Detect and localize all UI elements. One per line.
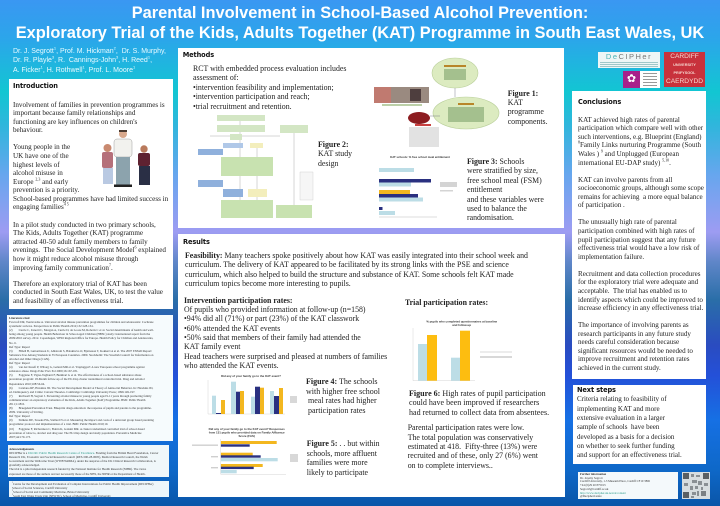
panel: further information: SegrottJ@Cardiff.ac.uk [580, 487, 608, 491]
heading: introduction: Introduction [13, 82, 58, 90]
heading: intervention participation rates: Intervention participation rates: [184, 296, 292, 304]
figure 5 caption: Figure 5: . . but within [307, 439, 380, 448]
authors: A. Ficker1, H. Rothwell1, Prof. L. Moore1 [13, 64, 135, 74]
figure 4 caption: Figure 4: The schools [306, 377, 377, 386]
panel: literature cited: (8) Bruegelen/Prevention Trust. Blueprint drugs education: the response of pupils and parents to the programme. [9, 406, 152, 410]
figure 5 caption: schools, more affluent [307, 449, 377, 458]
figure 2: study design flowchart [198, 115, 314, 218]
text: methods list: •intervention participation and reach; [193, 92, 310, 101]
text: conclusions body [578, 116, 704, 372]
panel: literature cited: No. 6. [9, 341, 17, 345]
text: young people: highest levels of [13, 161, 60, 169]
figure 5: affluence bar chart: Score (FAS) [239, 434, 255, 438]
panel: literature cited: communication: an exploratory evaluation of the Kids, Adults Together (KAT) Programme. BMC Public Health [9, 398, 145, 402]
authors: Dr. R. Playle3, R. Cannings-John3, H. Reed1, [13, 55, 152, 64]
authors: Dr. J. Segrott1, Prof. M. Hickman2, Dr. S. Murphy, [13, 45, 166, 54]
figure 6 caption: Figure 6: High rates of pupil participation [409, 389, 546, 398]
figure 2 caption: Figure 2: [318, 140, 349, 149]
text: conclusions body: socioeconomic groups, although some scope [578, 184, 704, 192]
text: pilot study: evenings. The Social Development Model6 explained [13, 245, 166, 254]
text: methods list [193, 64, 346, 111]
figure 6 caption: had returned to collect data from absentees. [409, 408, 549, 417]
panel: conclusions [572, 91, 706, 379]
panel: literature cited: Literature cited [9, 316, 30, 320]
title: Exploratory Trial of the Kids, Adults Together (KAT) Programme in South East Wales, UK [16, 24, 704, 42]
logo: DECIPHer: DeCIPHer [606, 52, 652, 61]
panel: acknowledgements [8, 445, 169, 477]
logo: Cardiff University: CARDIFF [670, 53, 699, 60]
panel: further information: +44 (0)29 20 875013 [580, 483, 605, 487]
panel: literature cited: (6) Catalano RF, Hawkins JD. The Social Development Model: A Theory of Antisocial Behavior. In: Hawkins JD, [9, 386, 153, 390]
text: next steps body: implementing KAT and more [577, 405, 660, 413]
panel: results [178, 234, 565, 497]
text: young people: Young people in the [13, 143, 70, 151]
panel: literature cited: 2007;44:170-173. [9, 435, 31, 439]
text: involvement of families: functioning are key influences on children's [13, 118, 137, 126]
text: conclusions body: KAT achieved high rates of parental [578, 116, 680, 124]
figure 3 caption: were stratified by size, [467, 166, 538, 175]
figure 5 caption: likely to participate [307, 468, 368, 477]
text: young people: UK have one of the [13, 152, 69, 160]
text: intervention participation: •50% said that members of their family had attended the [184, 333, 361, 342]
panel: literature cited: Ref Type: Report [9, 345, 30, 349]
figure 1: programme components diagram [374, 58, 500, 147]
panel: literature cited: systematic reviews. Perspectives in Public Health 2012;132:128-134. [9, 324, 93, 328]
text: conclusions body: achieved in the current study. [578, 364, 661, 372]
panel: affiliations: 2 School of Social and Community Medicine, Bristol University [12, 490, 89, 494]
panel: affiliations: 3 South East Wales Trials Unit (SEWTU), School of Medicine, Cardiff University [12, 494, 111, 498]
panel: literature cited: prevention of tobacco, alcohol and drug use: The EU-Dap design and study population. Preventive Medicine [9, 431, 141, 435]
text: conclusions body: Recruitment and data collection procedures [578, 270, 700, 278]
panel: methods [178, 48, 564, 228]
figure 3 caption: randomisation. [467, 213, 514, 222]
panel: affiliations [9, 481, 169, 497]
text: conclusions body: 8Family Links nurturing Programme (South [578, 140, 701, 149]
figure 5: affluence bar chart [192, 427, 298, 474]
panel: literature cited: 2011;11:810. [9, 402, 25, 406]
text: methods list: RCT with embedded process evaluation includes [193, 64, 346, 73]
text: feasibility: curriculum topics become more interesting to pupils. [185, 279, 351, 288]
text: conclusions body: effectiveness trial would have a low risk of [578, 244, 699, 252]
logo: Cardiff University: CAERDYDD [666, 78, 703, 85]
text: methods list: •trial recruitment and retention. [193, 102, 292, 111]
figure 3: free school meal chart [379, 155, 457, 218]
panel: further information: Cardiff University, 1-3 Museum Place, Cardiff CF10 3BD [580, 479, 650, 483]
text: young people: alcohol misuse in [13, 169, 63, 177]
text: conclusions body: of participation . [578, 201, 625, 209]
figure 5 caption: families were more [307, 458, 368, 467]
text: intervention participation: •94% did all (71%) or part (23%) of the KAT classwork [184, 314, 359, 323]
figure 6: questionnaire completion chart: and follow-up [452, 323, 471, 327]
text: intervention participation: Head teachers were surprised and pleased at numbers of families [184, 352, 387, 361]
text: conclusions body: remains for achieving a more equal balance [578, 193, 703, 201]
figure 4 caption: participation rates [308, 406, 366, 415]
figure 2 caption: KAT study [318, 149, 352, 158]
heading: trial participation rates: Trial participation rates: [405, 298, 488, 306]
figure 3 caption: free school meal (FSM) [467, 176, 542, 185]
panel: literature cited [7, 315, 173, 441]
text: next steps body: sample of schools have been [577, 423, 659, 431]
panel: literature cited: Ref Type: Report [9, 414, 30, 418]
title: Parental Involvement in School-Based Alcohol Prevention: [132, 4, 588, 22]
panel: acknowledgements: gratefully acknowledged. [9, 463, 40, 467]
text: conclusions body: pupil participation suggest that any future [578, 236, 696, 244]
figure 3: free school meal chart: KAT schools: % free school meal entitlement [390, 155, 450, 159]
panel: literature cited: Foxcroft DR, Tsertsvadze A. Universal alcohol misuse prevention programmes for children and adolescents: Cochrane [9, 320, 154, 324]
text: conclusions body: identify aspects which could be improved to [578, 296, 703, 304]
text: involvement of families: Involvement of families in prevention programmes is [13, 101, 165, 109]
panel: acknowledgements: Research UK, Economic and Social Research Council (RES-590-28-0005), Medical Research Council, the Welsh [9, 455, 148, 459]
title [16, 4, 704, 42]
text: methods list: assessment of: [193, 73, 239, 82]
figure 6 caption: could have been improved if researchers [409, 398, 539, 407]
figure 1 caption: programme [508, 107, 544, 116]
figure 5: affluence bar chart: from 131 pupils who provided data on Family Affluence [209, 430, 285, 434]
text: conclusions body: participation which compare well with other [578, 124, 703, 132]
figure 1 caption: KAT [508, 98, 523, 107]
text: conclusions body: for the exploratory trial were adequate and [578, 278, 698, 286]
panel: literature cited: 2009. University of Stirling. [9, 410, 43, 414]
figure 1 caption [508, 89, 548, 126]
text: conclusions body: KAT can involve parents from all [578, 176, 672, 184]
figure 6 caption [409, 389, 549, 417]
panel: literature cited: programme: protocol and implementation of a trial. BMC Public Health 2010;10. [9, 422, 108, 426]
panel: next steps [573, 385, 706, 464]
figure 4: family event bar chart [208, 374, 297, 414]
panel: literature cited: (3) Hibell B, Guttormsson U, Ahlstrom S, Balakireva O, Bjarnason T, Kokkevi A et al. The 2007 ESPAD Report: [9, 349, 152, 353]
text: next steps body: developed as a basis for a decision [577, 433, 674, 441]
logo: DECIPHer [598, 52, 660, 68]
text: intervention participation: Of pupils who provided information at follow-up (n=158) [184, 305, 366, 314]
panel: acknowledgements: expressed are those of the authors and not necessarily those of the NHS, the NIHR or the Department of Health. [9, 472, 145, 476]
panel: literature cited: (9) Simkiss DE, Snooks HA, Stallard N et al. Measuring the impact and costs of a universal group based parenting [9, 418, 154, 422]
figure 6: questionnaire completion chart: % pupils who completed questionnaires at baseline [426, 320, 498, 324]
text: parental participation: recruited and of these, only 27 (6%) went [408, 451, 538, 460]
text: intervention participation: •60% attended the KAT events [184, 324, 280, 332]
text: feasibility: curriculum. The delivery of KAT appeared to be facilitated by its strong links with the PSE and science [185, 260, 509, 269]
text: parental participation: on to complete interviews.. [408, 461, 493, 470]
panel: affiliations: 1 Centre for the Development and Evaluation of Complex Interventions for Public Health Improvement (DECIPHer) [12, 482, 153, 486]
text: involvement of families: behaviour. [13, 126, 43, 134]
text: conclusions body: research participants in any future study [578, 330, 691, 338]
text: intervention participation: KAT family event [184, 342, 240, 351]
panel: literature cited: Dependence 2010;108:56-64. [9, 382, 45, 386]
text: next steps body: and support for an effectiveness trial. [577, 451, 682, 459]
text: next steps body: on whether to seek further funding [577, 442, 675, 450]
panel: acknowledgements: Government and the Wellcome Trust (WT087640MA), under the auspices of the UK Clinical Research Collaboration, is [9, 459, 156, 463]
text: next steps body: extensive evaluation in a larger [577, 414, 665, 422]
text: parental participation: Parental participation rates were low. [408, 423, 524, 432]
text: methods list: •intervention feasibility and implementation; [193, 83, 334, 92]
panel: literature cited: Substance Use Among Students in 35 European Countries. 2009. Stockholm: The Swedish Council for Information on [9, 353, 153, 357]
heading: methods: Methods [183, 51, 214, 59]
text: pilot study [13, 221, 166, 272]
panel: affiliations: School of Social Sciences, Cardiff University [12, 486, 67, 490]
text: feasibility: Feasibility: Many teachers spoke positively about how KAT was easily integrated into their school week and [185, 251, 528, 260]
panel: literature cited: (5) Faggiano F, Vigna-Taglianti F, Burkhart G et al. The effectiveness of a school-based substance abuse [9, 373, 141, 377]
text: parental participation: estimated at 418. Fifty-three (13%) were [408, 442, 537, 451]
panel: acknowledgements: The trial is a pilot independent research funded by the National Institute for Health Research (NIHR). The views [9, 467, 146, 471]
text: conclusions body: international EU-DAP study) 5,10. [578, 157, 671, 166]
text: conclusions body: increase efficiency in any effectiveness trial. [578, 304, 703, 312]
panel: further information: http://www.decipher.uk.net/en/content [580, 491, 626, 495]
text: conclusions body: such interventions, e.g. Blueprint (England) [578, 133, 702, 141]
text: young people: engaging families4 5 [13, 202, 69, 211]
text: pilot study: improving family communication7. [13, 262, 113, 272]
text: intervention participation: who attended the KAT events. [184, 361, 279, 370]
logo: Cardiff University: UNIVERSITY [673, 63, 696, 67]
text: conclusions body: significant resources would be needed to [578, 347, 693, 355]
text: parental participation: The total population was conservatively [408, 433, 533, 442]
text: feasibility: curriculum, which also helped to build the structure and substance of KAT. Some schools felt KAT made [185, 270, 514, 279]
panel: literature cited: ed. Delinquency and Crime: Current Theories. Cambridge: Cambridge University Press; 1996:149-197. [9, 390, 135, 394]
figure 5: affluence bar chart: Did any of your family go to the KAT event? Responses [209, 427, 285, 431]
panel: literature cited: substance abuse. Drugs Educ Prev Pol 2009;16:167-181. [9, 369, 78, 373]
text: next steps body: Criteria relating to feasibility of [577, 395, 667, 403]
panel: literature cited: (7) Rothwell H, Segrott J. Preventing alcohol misuse in young people aged 9-11 years through promoting family [9, 394, 151, 398]
figure 4 caption: meal rates had higher [308, 396, 377, 405]
panel: further information: Further information [580, 472, 606, 476]
figure 4 caption: with higher free school [306, 387, 380, 396]
panel: literature cited: 2009/2010 survey. 2012. Copenhagen, WHO Regional Office for Europe. Health Policy for Children and Adolescents, [9, 336, 153, 340]
panel: literature cited: being among young people. Health Behaviour in School-aged Children (HBSC) study: international report from the [9, 332, 150, 336]
logo: Cardiff University: PRIFYSGOL [674, 71, 695, 75]
text: next steps body [577, 395, 682, 459]
text: conclusions body: The unusually high rate of parental [578, 218, 677, 226]
heading: conclusions: Conclusions [578, 98, 621, 106]
authors [13, 45, 166, 74]
text: parental participation [408, 423, 538, 470]
panel: further information: @DecipherCentre [580, 494, 602, 498]
text: involvement of families: important because family relationships and [13, 109, 135, 117]
panel: further information: Dr. Jeremy Segrott [580, 476, 603, 480]
panel: literature cited: (10) Faggiano F, Richardson C, Bohrn K, Galanti MR. A cluster randomized controlled trial of school-based [9, 427, 145, 431]
panel: literature cited: (4) van der Kreeft P, Wiborg G, Galanti MR et al. 'Unplugged': A new European school programme against [9, 365, 145, 369]
text: young people: School-based programmes have had limited success in [13, 195, 168, 203]
text: young people [13, 143, 168, 211]
figure 1 caption: components. [508, 117, 548, 126]
figure 5 caption [306, 439, 380, 477]
text: exploratory trial: and feasibility of an effectiveness trial. [13, 297, 123, 305]
figure 6: questionnaire completion chart [412, 320, 512, 381]
text: conclusions body: needs careful consideration because [578, 338, 679, 346]
figure 1 caption: Figure 1: [508, 89, 538, 98]
text: conclusions body: The importance of involving parents as [578, 321, 689, 329]
figure 3 caption: and these variables were [467, 195, 544, 204]
text: feasibility [185, 251, 528, 288]
text: exploratory trial: conducted in South East Wales, UK, to test the value [13, 288, 163, 296]
logo: SEWTU [623, 71, 660, 88]
text: young people: prevention is a priority. [13, 186, 79, 194]
figure 3 caption: used to balance the [467, 204, 527, 213]
text: exploratory trial [13, 280, 163, 305]
text: exploratory trial: Therefore an exploratory trial of KAT has been [13, 280, 147, 288]
figure 2 caption [318, 140, 352, 168]
text: young people: Europe 2,3 and early [13, 176, 68, 186]
text: involvement of families [13, 101, 165, 134]
panel: literature cited: Alcohol and Other Drugs (CAN). [9, 357, 50, 361]
figure 2 caption: design [318, 159, 338, 168]
figure 4 caption [306, 377, 380, 415]
figure 3 caption: Figure 3: Schools [467, 157, 524, 166]
text: conclusions body: participation combined with high rates of [578, 227, 694, 235]
text: pilot study: In a pilot study conducted in two primary schools, [13, 221, 156, 229]
panel: acknowledgements: Acknowledgements [9, 447, 34, 451]
figure 4: family event bar chart: Did any of your family go to the KAT event? [221, 374, 281, 378]
icon: QR code [682, 472, 710, 499]
figure 3 caption [467, 157, 544, 222]
panel: literature cited: prevention program: 18-Month follow-up of the EU-Dap cluster randomized controlled trial. Drug and Alcohol [9, 377, 145, 381]
heading: results: Results [183, 238, 210, 246]
text: conclusions body: acceptable. The trial has enabled us to [578, 287, 687, 295]
heading: next steps: Next steps [577, 386, 616, 394]
panel: acknowledgements: DECIPHer is a UKCRC Public Health Research Centre of Excellence. Funding from the British Heart Foundation, Cancer [9, 451, 158, 455]
text: pilot study: attracted 40-50 adult family members to family [13, 238, 148, 246]
text: conclusions body: improve recruitment and retention rates [578, 355, 690, 363]
panel: introduction [9, 79, 173, 309]
figure 3 caption: entitlement [467, 185, 502, 194]
text: conclusions body: implementation failure. [578, 253, 644, 261]
text: conclusions body: Wales ) 9 and Unplugged (European [578, 149, 679, 158]
text: pilot study: how it might reduce alcohol misuse through [13, 255, 138, 263]
text: pilot study: The Kids, Adults Together (KAT) programme [13, 229, 143, 237]
panel: further information [578, 472, 678, 499]
logo: SEWTU: ✿ [627, 72, 636, 85]
icon: family illustration [102, 130, 150, 187]
logo: Cardiff University [664, 52, 705, 87]
text: intervention participation [184, 305, 387, 370]
panel: literature cited: (2) Currie C, Zanotti C, Morgan A, Currie D, de Looze M, Roberts C et al. Social determinants of health and well- [9, 328, 154, 332]
panel: literature cited: Ref Type: Report [9, 361, 30, 365]
